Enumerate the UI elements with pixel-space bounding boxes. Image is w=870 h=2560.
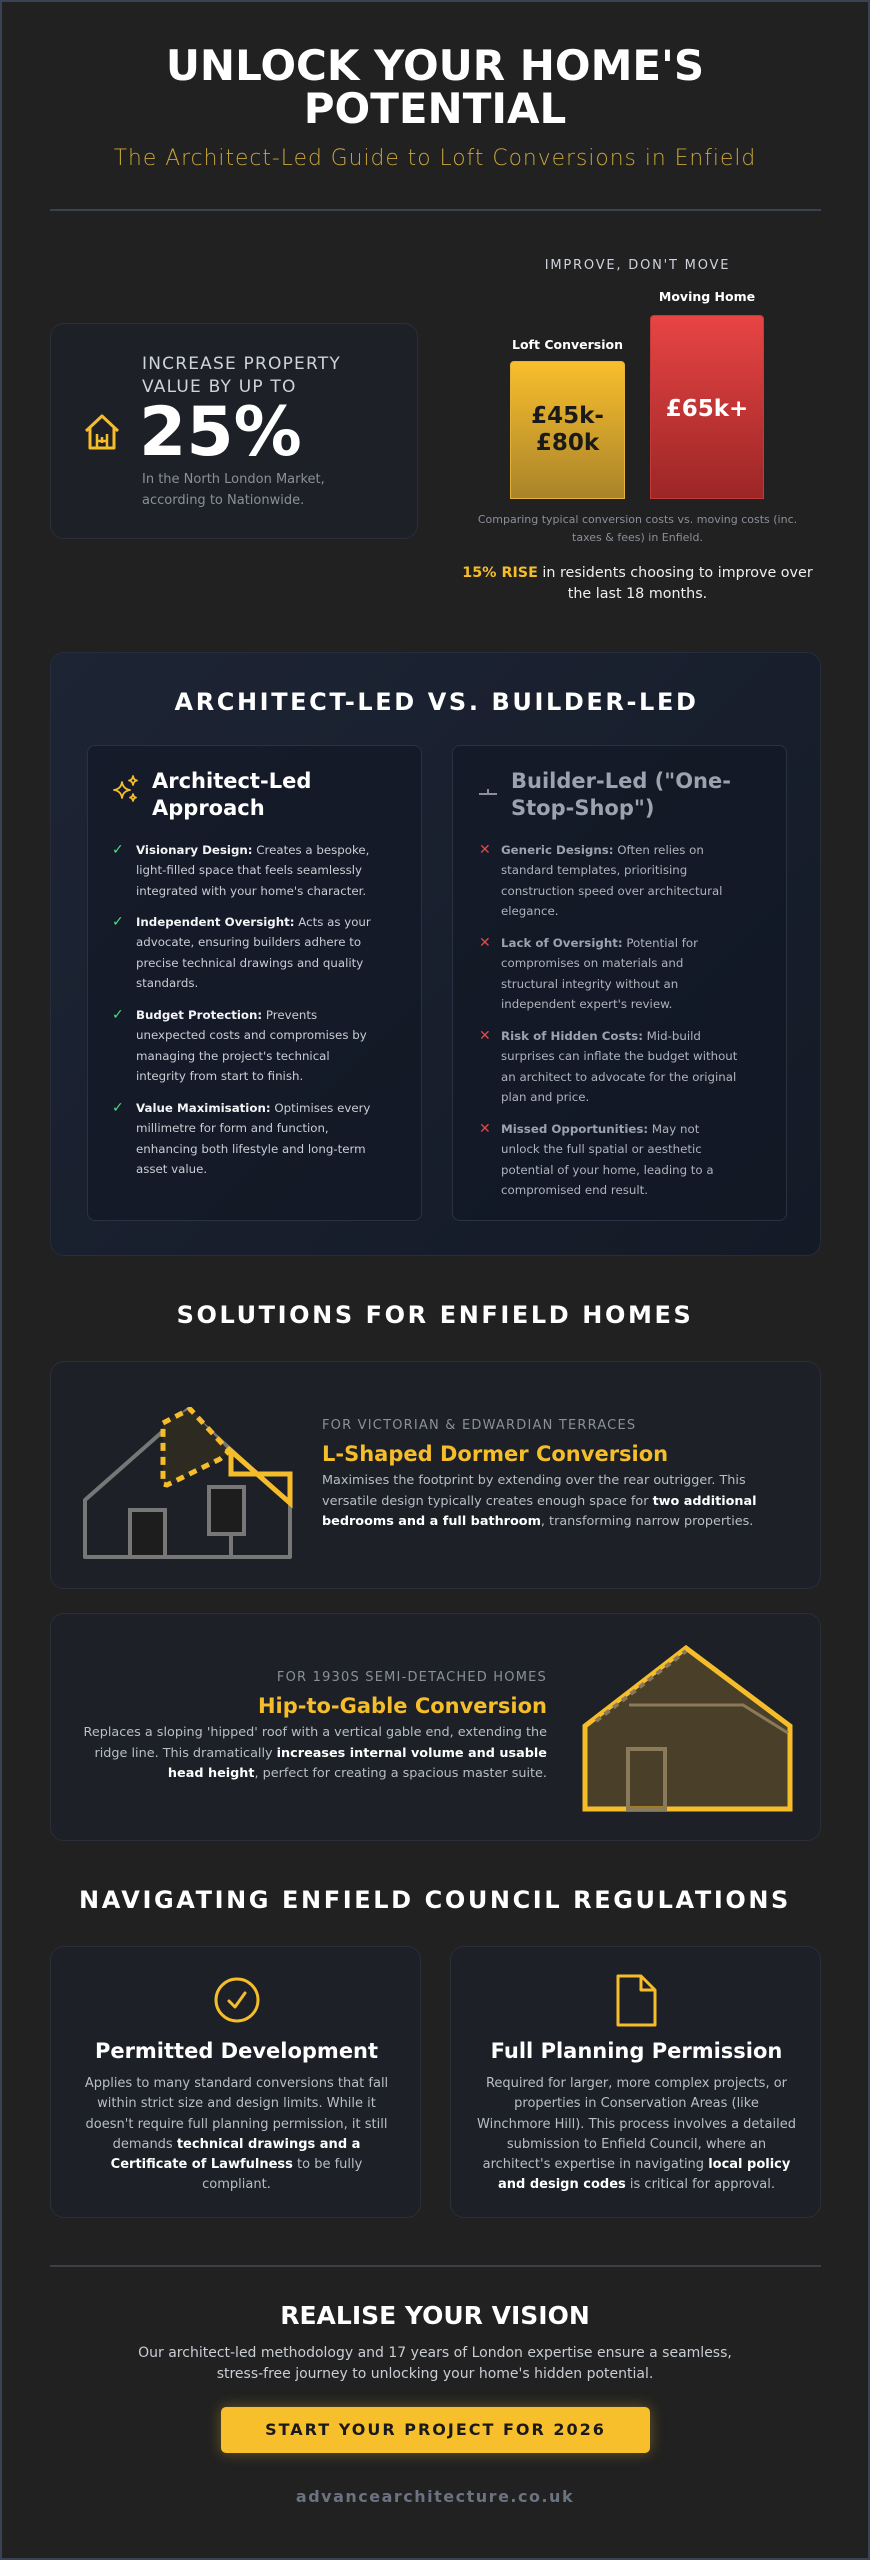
- card: architect-led: [87, 745, 422, 1221]
- card title: Builder-Led ("One-: [511, 769, 731, 793]
- body: Required for larger, more complex projects, or: [486, 2076, 787, 2091]
- item: hidden costs: plan and price.: [501, 1090, 589, 1104]
- chart: improve vs move: [462, 258, 813, 602]
- card: architect-led: ✓: [112, 1100, 124, 1116]
- item: missed opportunities: compromised end result.: [501, 1183, 648, 1197]
- card: architect-led: ✓: [112, 842, 124, 858]
- body: Winchmore Hill). This process involves a detailed: [477, 2117, 796, 2132]
- callout: 15% rise: [462, 565, 813, 602]
- item: lack of oversight: [479, 935, 698, 1011]
- item: generic designs: elegance.: [501, 904, 558, 918]
- title: Full Planning Permission: [491, 2039, 782, 2063]
- card: full planning: [450, 1946, 821, 2218]
- text: hip to gable: head height, perfect for creating a spacious master suite.: [168, 1766, 547, 1781]
- item: hidden costs: an architect to advocate for the original: [501, 1070, 736, 1084]
- stat label: VALUE BY UP TO: [142, 377, 297, 397]
- item: budget protection: Budget Protection: Prevents: [136, 1008, 317, 1022]
- subtitle: The Architect-Led Guide to Loft Conversions in Enfield: [114, 146, 756, 171]
- item: budget protection: unexpected costs and compromises by: [136, 1028, 367, 1042]
- body: doesn't require full planning permission, it still: [86, 2117, 387, 2132]
- chart title: IMPROVE, DON'T MOVE: [545, 258, 730, 273]
- text: dormer: versatile design typically creates enough space for two additional: [322, 1494, 757, 1508]
- stat number: 25%: [139, 393, 302, 472]
- text: dormer: [322, 1418, 757, 1529]
- item: independent oversight: advocate, ensuring builders adhere to: [136, 935, 361, 949]
- panel: value stat: [50, 323, 418, 539]
- text: dormer: bedrooms and a full bathroom, transforming narrow properties.: [322, 1514, 753, 1529]
- item: generic designs: construction speed over architectural: [501, 884, 722, 898]
- bar: loft conversion: Loft Conversion: [512, 337, 623, 352]
- text: dormer: FOR VICTORIAN & EDWARDIAN TERRACES: [322, 1418, 636, 1433]
- icon: sparkles: [113, 775, 138, 802]
- icon: tool: [479, 789, 497, 795]
- title: [166, 41, 704, 133]
- panel: hip-to-gable: [50, 1613, 821, 1841]
- text: dormer: L-Shaped Dormer Conversion: [322, 1442, 668, 1466]
- item: visionary design: Visionary Design: Creates a bespoke,: [136, 843, 369, 857]
- chart caption: [478, 513, 797, 544]
- icon: document: [616, 1974, 656, 2026]
- item: lack of oversight: compromises on materials and: [501, 956, 683, 970]
- icon: gable house: [582, 1645, 792, 1812]
- text: closing: [138, 2345, 732, 2382]
- heading: regulations: NAVIGATING ENFIELD COUNCIL REGULATIONS: [79, 1886, 791, 1914]
- stat label: INCREASE PROPERTY: [142, 354, 341, 374]
- item: hidden costs: Risk of Hidden Costs: Mid-build: [501, 1029, 701, 1043]
- text: closing: Our architect-led methodology and 17 years of London expertise ensure a seamless,: [138, 2345, 732, 2361]
- item: value maximisation: Value Maximisation: Optimises every: [136, 1101, 370, 1115]
- card: builder-led: [452, 745, 787, 1221]
- stat source: according to Nationwide.: [142, 493, 304, 508]
- item: missed opportunities: Missed Opportunities: May not: [501, 1122, 699, 1136]
- body: demands technical drawings and a: [113, 2137, 360, 2152]
- body: architect's expertise in navigating local policy: [483, 2157, 790, 2172]
- bar: moving home: Moving Home: [659, 289, 755, 304]
- icon: dormer house: [83, 1407, 292, 1559]
- stat label: [142, 354, 341, 397]
- item: independent oversight: [112, 914, 371, 990]
- body: compliant.: [202, 2177, 271, 2192]
- item: hidden costs: [479, 1028, 738, 1104]
- stat source: In the North London Market,: [142, 472, 325, 487]
- item: budget protection: [112, 1007, 367, 1083]
- item: value maximisation: [112, 1100, 370, 1176]
- text: hip to gable: Replaces a sloping 'hipped' roof with a vertical gable end, extending the: [84, 1725, 547, 1740]
- panel: L-shaped dormer: [50, 1361, 821, 1589]
- item: value maximisation: asset value.: [136, 1162, 207, 1176]
- item: value maximisation: millimetre for form and function,: [136, 1121, 329, 1135]
- card title: Stop-Shop"): [511, 796, 654, 820]
- item: missed opportunities: unlock the full spatial or aesthetic: [501, 1142, 702, 1156]
- body: Certificate of Lawfulness to be fully: [111, 2157, 362, 2172]
- card: builder-led: ✕: [479, 935, 491, 951]
- item: hidden costs: surprises can inflate the budget without: [501, 1049, 737, 1063]
- body: [477, 2076, 796, 2192]
- card: builder-led: ✕: [479, 842, 491, 858]
- item: missed opportunities: [479, 1121, 714, 1197]
- body: properties in Conservation Areas (like: [514, 2096, 759, 2111]
- item: independent oversight: standards.: [136, 976, 198, 990]
- bar: loft conversion: £45k-: [531, 403, 604, 429]
- stat source: [142, 472, 325, 508]
- card: builder-led: ✕: [479, 1121, 491, 1137]
- card title: [511, 769, 731, 820]
- item: budget protection: integrity from start to finish.: [136, 1069, 303, 1083]
- title: POTENTIAL: [304, 84, 566, 133]
- icon: house: [85, 414, 119, 450]
- item: independent oversight: Independent Oversight: Acts as your: [136, 915, 371, 929]
- card: permitted development: [50, 1946, 421, 2218]
- item: generic designs: [479, 842, 722, 918]
- bar: loft conversion: £80k: [536, 430, 599, 456]
- item: budget protection: managing the project's technical: [136, 1049, 330, 1063]
- body: and design codes is critical for approval.: [498, 2177, 775, 2192]
- card: builder-led: ✕: [479, 1028, 491, 1044]
- bar: moving home: £65k+: [666, 396, 748, 422]
- body: submission to Enfield Council, where an: [507, 2137, 766, 2152]
- item: independent oversight: precise technical drawings and quality: [136, 956, 363, 970]
- title: Permitted Development: [95, 2039, 378, 2063]
- item: generic designs: Generic Designs: Often relies on: [501, 843, 704, 857]
- card: architect-led: ✓: [112, 1007, 124, 1023]
- text: hip to gable: Hip-to-Gable Conversion: [258, 1694, 547, 1718]
- heading: realise your vision: REALISE YOUR VISION: [280, 2301, 590, 2330]
- callout: 15% rise: the last 18 months.: [568, 586, 707, 602]
- heading: ARCHITECT-LED VS. BUILDER-LED: [175, 688, 698, 716]
- item: lack of oversight: structural integrity without an: [501, 977, 678, 991]
- body: within strict size and design limits. While it: [97, 2096, 376, 2111]
- body: Applies to many standard conversions that fall: [85, 2076, 388, 2091]
- item: value maximisation: enhancing both lifestyle and long-term: [136, 1142, 366, 1156]
- button: CTA: [221, 2407, 650, 2453]
- card title: Architect-Led: [152, 769, 311, 793]
- button: CTA: START YOUR PROJECT FOR 2026: [265, 2420, 606, 2439]
- card title: Approach: [152, 796, 265, 820]
- item: visionary design: light-filled space that feels seamlessly: [136, 863, 362, 877]
- item: lack of oversight: Lack of Oversight: Potential for: [501, 936, 698, 950]
- card title: [152, 769, 311, 820]
- panel: architect vs builder: [50, 652, 821, 1256]
- bar: loft conversion: [510, 337, 625, 499]
- item: visionary design: [112, 842, 369, 898]
- heading: solutions: SOLUTIONS FOR ENFIELD HOMES: [177, 1301, 693, 1329]
- text: hip to gable: FOR 1930S SEMI-DETACHED HOMES: [277, 1670, 547, 1685]
- bar: moving home: [650, 289, 764, 499]
- chart caption: taxes & fees) in Enfield.: [572, 531, 703, 544]
- text: hip to gable: ridge line. This dramatically increases internal volume and usable: [94, 1746, 547, 1760]
- item: lack of oversight: independent expert's review.: [501, 997, 672, 1011]
- chart caption: Comparing typical conversion costs vs. moving costs (inc.: [478, 513, 797, 526]
- item: generic designs: standard templates, prioritising: [501, 863, 687, 877]
- callout: 15% rise: 15% RISE in residents choosing to improve over: [462, 565, 813, 581]
- body: [85, 2076, 388, 2192]
- item: missed opportunities: potential of your home, leading to a: [501, 1163, 714, 1177]
- text: closing: stress-free journey to unlocking your home's hidden potential.: [217, 2366, 653, 2382]
- title: UNLOCK YOUR HOME'S: [166, 41, 704, 90]
- card: architect-led: ✓: [112, 914, 124, 930]
- icon: check circle: [214, 1978, 260, 2022]
- text: hip to gable: [84, 1670, 547, 1781]
- text: dormer: Maximises the footprint by extending over the rear outrigger. This: [322, 1473, 746, 1488]
- item: visionary design: integrated with your home's character.: [136, 884, 366, 898]
- footer: website: advancearchitecture.co.uk: [296, 2487, 574, 2506]
